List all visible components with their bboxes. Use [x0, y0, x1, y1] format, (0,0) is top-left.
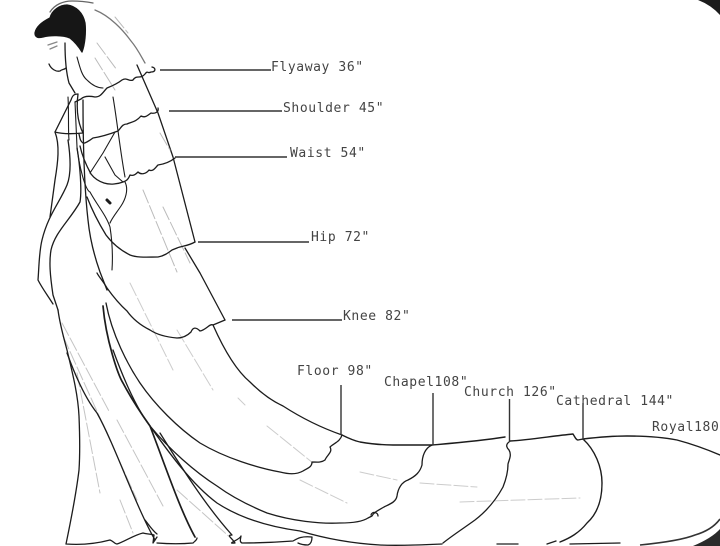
callout: Church 126: Church 126"	[464, 385, 557, 400]
callout: Hip 72: Hip 72"	[311, 230, 370, 245]
callout: Knee 82: Knee 82"	[343, 309, 410, 324]
veil: outer edge	[50, 1, 225, 320]
icon: chapel hem curl	[371, 512, 378, 516]
chapel length hem	[113, 350, 432, 523]
ruffle: hip edge	[87, 197, 195, 257]
callout: Royal 180: Royal180	[652, 420, 719, 435]
callout: Cathedral 144: Cathedral 144"	[556, 394, 674, 409]
line: royal train bottom edge	[150, 426, 442, 545]
cathedral length hem	[560, 439, 602, 542]
veil: faint gathers	[62, 17, 580, 540]
face and neck	[48, 42, 75, 93]
bride: shoulder and arm	[38, 94, 83, 310]
ruffle: shoulder edge	[79, 108, 158, 143]
line: dashed bottom edge	[497, 541, 620, 544]
black frame corner: bottom right	[640, 519, 720, 546]
black frame corner: top right	[698, 0, 720, 15]
callout: Floor 98: Floor 98"	[297, 364, 373, 379]
line: train top edge	[342, 434, 720, 455]
church length hem	[443, 442, 510, 543]
ruffle: knee edge	[97, 273, 225, 338]
callout: Chapel 108	[384, 375, 468, 445]
bride: gown left side	[58, 310, 197, 544]
callout: Church 126	[464, 385, 557, 442]
icon: hair	[35, 5, 85, 52]
ruffle: waist edge	[80, 146, 175, 184]
callout: Flyaway 36: Flyaway 36"	[271, 60, 364, 75]
floor length curve	[213, 325, 342, 435]
callout: Chapel 108: Chapel108"	[384, 375, 468, 390]
callout: Cathedral 144	[556, 394, 674, 440]
floor hem	[106, 303, 342, 474]
bride: gown inner folds	[67, 57, 312, 545]
callout: Waist 54: Waist 54"	[290, 146, 366, 161]
callout: Floor 98	[297, 364, 373, 435]
callout: Shoulder 45: Shoulder 45"	[283, 101, 384, 116]
ruffle: flyaway edge	[75, 67, 155, 102]
